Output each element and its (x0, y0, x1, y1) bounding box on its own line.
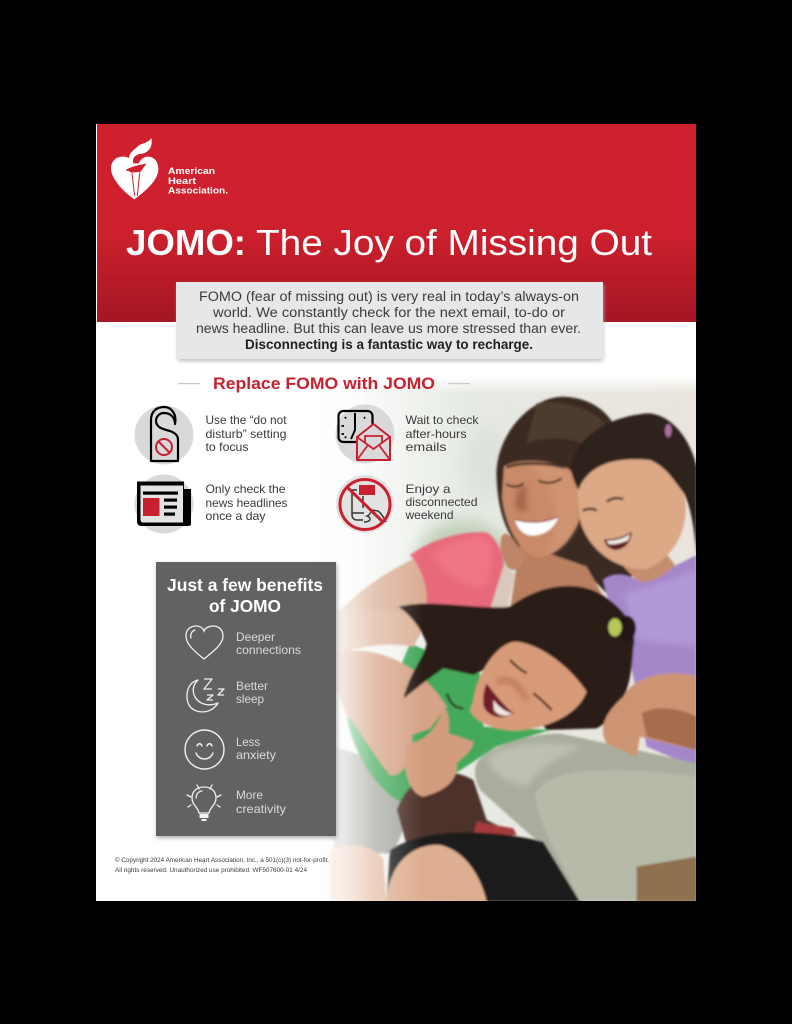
text: news headlines: Only check the (206, 482, 286, 496)
intro text box (176, 282, 603, 361)
text: deeper connections: connections (236, 643, 301, 657)
page background (96, 124, 696, 901)
icon: smiley face (185, 730, 224, 769)
text: more creativity: More (236, 788, 263, 802)
copyright note: © Copyright 2024 American Heart Association, Inc., a 501(c)(3) not-for-profit. (115, 857, 329, 864)
icon: heart (186, 626, 223, 659)
mother's arm and neck (337, 555, 447, 613)
intro text box: Disconnecting is a fantastic way to recharge. (245, 337, 533, 352)
child's hand on neck (500, 534, 525, 570)
text: better sleep: sleep (236, 692, 264, 706)
photo: mother with two laughing daughters (297, 377, 697, 903)
intro text box: FOMO (fear of missing out) is very real in today’s always-on (199, 289, 579, 304)
red header band (97, 124, 696, 322)
section heading: Replace FOMO with JOMO: Replace FOMO with JOMO (213, 374, 435, 393)
lower girl's face (470, 642, 587, 731)
text: do not disturb: Use the “do not (206, 413, 287, 427)
text: after-hours emails: emails (406, 440, 447, 454)
logo: American Heart Association (111, 138, 228, 199)
lower girl's hair (398, 586, 634, 730)
lower shorts base (333, 747, 410, 853)
green shirt (347, 643, 550, 805)
text: after-hours emails: Wait to check (406, 413, 479, 427)
text: less anxiety: anxiety (236, 748, 276, 762)
logo: American Heart Association: American (168, 166, 215, 177)
text: after-hours emails: after-hours (406, 427, 467, 441)
text: better sleep: Better (236, 679, 268, 693)
icon: no phone (336, 475, 394, 533)
text: disconnected weekend: disconnected (406, 495, 478, 509)
mother's hair (494, 395, 634, 594)
intro text box: news headline. But this can leave us more stressed than ever. (196, 321, 581, 336)
right girl's shirt (603, 555, 697, 768)
mother's face (502, 461, 583, 557)
text: do not disturb: disturb” setting (206, 427, 286, 441)
text: deeper connections: Deeper (236, 630, 275, 644)
icon: moon and Z letters (187, 679, 224, 712)
lower girl's hand (405, 708, 473, 797)
pants (475, 733, 697, 902)
logo: American Heart Association: Association. (168, 186, 228, 196)
text: news headlines: news headlines (206, 496, 288, 510)
benefits heading: Just a few benefits (167, 575, 323, 595)
panel: benefits of JOMO (156, 562, 337, 838)
shorts and legs (387, 832, 580, 902)
intro text box: world. We constantly check for the next email, to-do or (212, 305, 566, 320)
mother's forearm and child's hand (603, 673, 697, 757)
icon: light bulb (187, 785, 221, 821)
title: The Joy of Missing Out (256, 222, 652, 263)
text: more creativity: creativity (236, 802, 286, 816)
benefits heading: of JOMO (209, 596, 281, 616)
right girl's neck and face (623, 550, 675, 582)
text: disconnected weekend: weekend (404, 508, 454, 522)
title: JOMO: (126, 222, 246, 263)
copyright note: All rights reserved. Unauthorized use prohibited. WF507600-01 4/24 (115, 867, 308, 874)
shadow under hand (397, 772, 517, 845)
icon: clock and envelope (336, 404, 394, 464)
icon: newspaper (134, 474, 194, 534)
text: news headlines: once a day (206, 509, 266, 523)
icon: do not disturb door hanger (134, 406, 194, 464)
text: do not disturb: to focus (206, 440, 249, 454)
mother's shirt (410, 532, 504, 613)
text: less anxiety: Less (236, 735, 260, 749)
text: disconnected weekend: Enjoy a (406, 482, 451, 496)
lower girl's arm (337, 650, 447, 775)
logo: American Heart Association: Heart (168, 176, 197, 187)
